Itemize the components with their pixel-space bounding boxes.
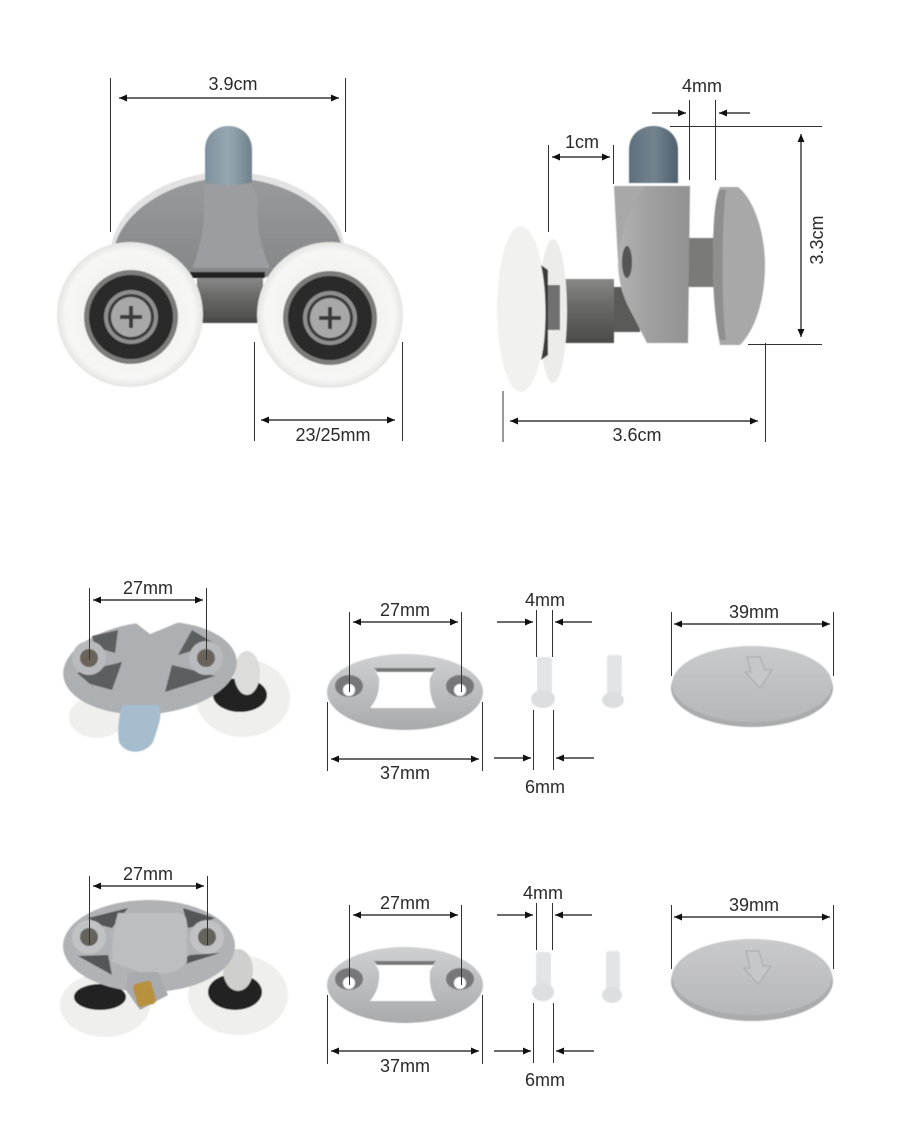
- dimension: 4mm top: 4mm: [682, 76, 722, 96]
- product: side view roller: [497, 126, 765, 392]
- dimension: 37mm row 3: [328, 995, 482, 1076]
- dimension: 4mm top: [652, 76, 750, 180]
- dimension: 4mm row 3: [497, 883, 592, 950]
- dimension: 6mm row 2: 6mm: [525, 777, 565, 797]
- dimension: 6mm row 3: 6mm: [525, 1070, 565, 1090]
- dimension: 27mm row 2 product: [90, 578, 206, 660]
- dimension: 4mm row 2: 4mm: [525, 590, 565, 610]
- dimension: 3.3cm: 3.3cm: [807, 215, 827, 265]
- dimension: 6mm row 3: [494, 1003, 594, 1090]
- dimension: 39mm row 3: [672, 895, 834, 969]
- dimension: 1cm: 1cm: [565, 132, 599, 152]
- dimension: 23/25mm: 23/25mm: [295, 425, 371, 445]
- dimension: 3.9cm: [110, 74, 346, 232]
- dimension: 27mm row 3 product: [90, 864, 208, 945]
- screw left row 3: [532, 952, 554, 1001]
- dimension: 4mm row 3: 4mm: [523, 883, 563, 903]
- screw right row 3: [602, 951, 622, 1003]
- screw left row 2: [531, 657, 555, 708]
- dimension: 1cm: [548, 132, 614, 232]
- dimension: 23/25mm: [254, 342, 402, 445]
- dimension: 27mm plate row 3: 27mm: [380, 893, 430, 913]
- dimension: 27mm plate row 3: [350, 893, 462, 985]
- dimension: 39mm row 2: [672, 602, 834, 676]
- screw right row 2: [602, 655, 624, 708]
- dimension: 27mm row 3 product: 27mm: [123, 864, 173, 884]
- dimension: 3.9cm: 3.9cm: [208, 74, 258, 94]
- product: front view double roller: [57, 126, 403, 388]
- part: oval mounting plate row 3: [327, 947, 483, 1023]
- dimension: 37mm row 2: [328, 702, 482, 783]
- dimension: 3.3cm: [670, 126, 827, 344]
- dimension: 39mm row 2: 39mm: [729, 602, 779, 622]
- dimension: 3.6cm: [503, 343, 766, 445]
- dimension: 39mm row 3: 39mm: [729, 895, 779, 915]
- dimension: 27mm row 2 product: 27mm: [123, 578, 173, 598]
- dimension: 4mm row 2: [497, 590, 592, 657]
- product: roller underside, blue pin: [59, 612, 290, 752]
- part: oval mounting plate row 2: [327, 654, 483, 730]
- dimension: 6mm row 2: [494, 710, 594, 797]
- part: round cap with arrow row 3: [671, 939, 833, 1021]
- dimension: 27mm plate row 2: [350, 600, 462, 692]
- dimension: 27mm plate row 2: 27mm: [380, 600, 430, 620]
- part: round cap with arrow row 2: [671, 646, 833, 727]
- dimension: 37mm row 2: 37mm: [380, 763, 430, 783]
- dimension: 3.6cm: 3.6cm: [612, 425, 662, 445]
- product: roller underside, brass screw: [60, 900, 288, 1037]
- dimension: 37mm row 3: 37mm: [380, 1056, 430, 1076]
